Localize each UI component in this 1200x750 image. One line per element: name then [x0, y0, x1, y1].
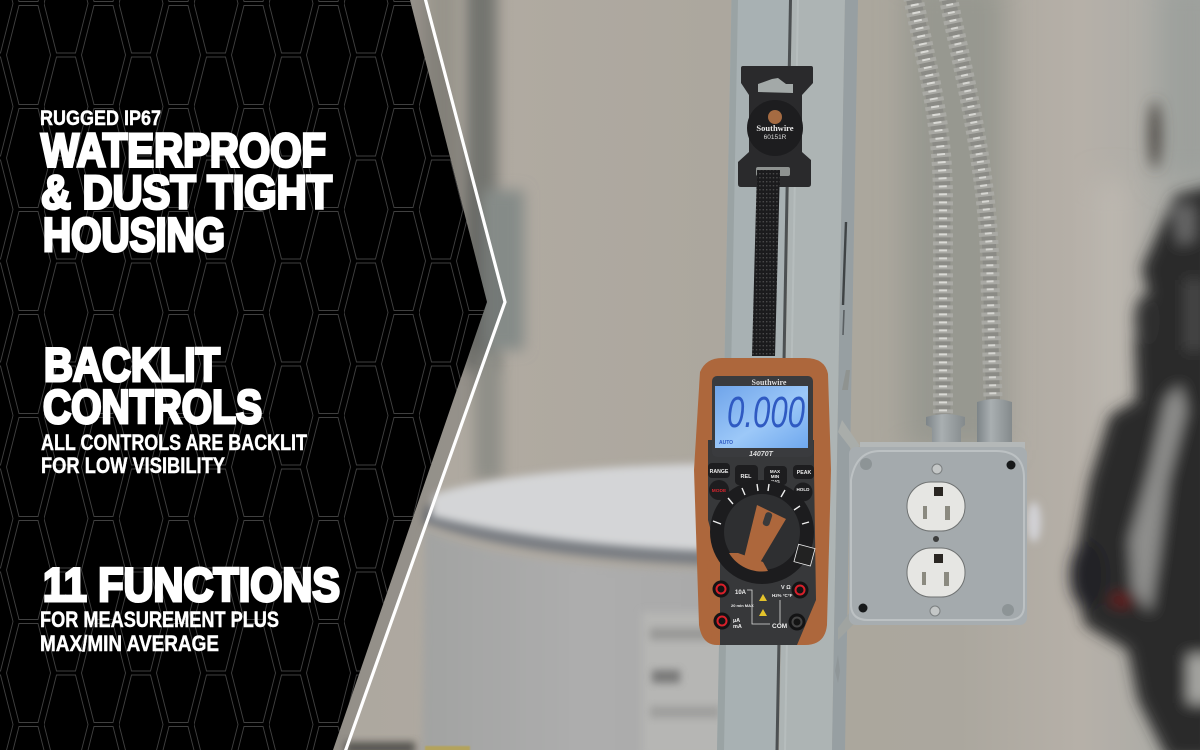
LCD auto label: AUTO — [719, 440, 733, 446]
terminal labels: V Ω — [781, 585, 791, 591]
connector left — [926, 414, 965, 444]
heading line 2: CONTROLS — [43, 380, 262, 433]
terminal labels: 10A — [735, 590, 747, 596]
description line 1: FOR MEASUREMENT PLUS — [40, 607, 279, 632]
rotary dial — [710, 480, 815, 584]
buttons: PEAK — [797, 470, 811, 476]
junction box with duplex outlet — [849, 399, 1027, 625]
description line 2: FOR LOW VISIBILITY — [41, 453, 225, 478]
model number: 60151R — [764, 134, 787, 141]
heading: 11 FUNCTIONS — [43, 558, 340, 611]
description line 1: ALL CONTROLS ARE BACKLIT — [41, 430, 307, 455]
LCD screen — [715, 386, 808, 448]
buttons: HOLD — [796, 487, 810, 492]
buttons: MAX — [770, 469, 781, 474]
feature: backlit controls — [41, 338, 307, 478]
brand on bezel: Southwire — [752, 378, 787, 387]
cover plate — [849, 447, 1027, 625]
eyebrow: RUGGED IP67 — [40, 107, 161, 130]
terminal labels: µA — [733, 618, 740, 624]
terminal labels: 20 min MAX — [731, 603, 754, 608]
logo mark — [768, 110, 782, 124]
hanging magnet and strap — [738, 66, 813, 356]
white chevron outline — [345, 0, 505, 750]
strap — [752, 168, 780, 356]
bucket — [345, 463, 1041, 750]
buttons: REL — [740, 474, 752, 480]
terminal labels: mA — [733, 624, 742, 630]
outlet bottom — [907, 548, 965, 597]
buttons: RANGE — [710, 469, 729, 475]
dark face panel — [708, 440, 816, 645]
multimeter — [694, 358, 831, 645]
terminal labels: Hz% °C°F — [772, 593, 793, 598]
buttons — [708, 463, 814, 502]
input jacks — [712, 580, 808, 630]
buttons: MODE — [712, 488, 727, 494]
hanger slot — [758, 78, 793, 93]
LCD digits: 0.000 — [727, 388, 805, 437]
display bezel — [712, 376, 813, 457]
heading line 1: WATERPROOF — [41, 124, 326, 176]
meter housing — [694, 358, 831, 645]
buttons: MIN — [771, 474, 780, 479]
chevron side band tint — [333, 0, 505, 750]
hardware screws and holes — [858, 458, 1016, 616]
connector right — [977, 399, 1012, 445]
blurred black cable — [1070, 101, 1200, 750]
model label: 14070T — [749, 451, 774, 458]
description line 2: MAX/MIN AVERAGE — [40, 631, 219, 656]
buttons: AVG — [770, 479, 780, 484]
terminal labels: COM — [772, 623, 787, 630]
brand: Southwire — [756, 123, 794, 133]
black chevron panel with hexagon pattern — [0, 0, 487, 750]
feature: waterproof housing — [40, 107, 332, 261]
steel strut post — [717, 0, 860, 750]
magnet disc — [747, 100, 803, 156]
terminal labels — [731, 585, 793, 630]
heading line 3: HOUSING — [43, 208, 225, 261]
conduits — [913, 0, 993, 415]
magnetic hanger — [738, 66, 813, 187]
heading line 2: & DUST TIGHT — [41, 166, 332, 218]
heading line 1: BACKLIT — [44, 338, 220, 391]
feature: 11 functions — [40, 558, 340, 656]
outlet top — [907, 482, 965, 531]
